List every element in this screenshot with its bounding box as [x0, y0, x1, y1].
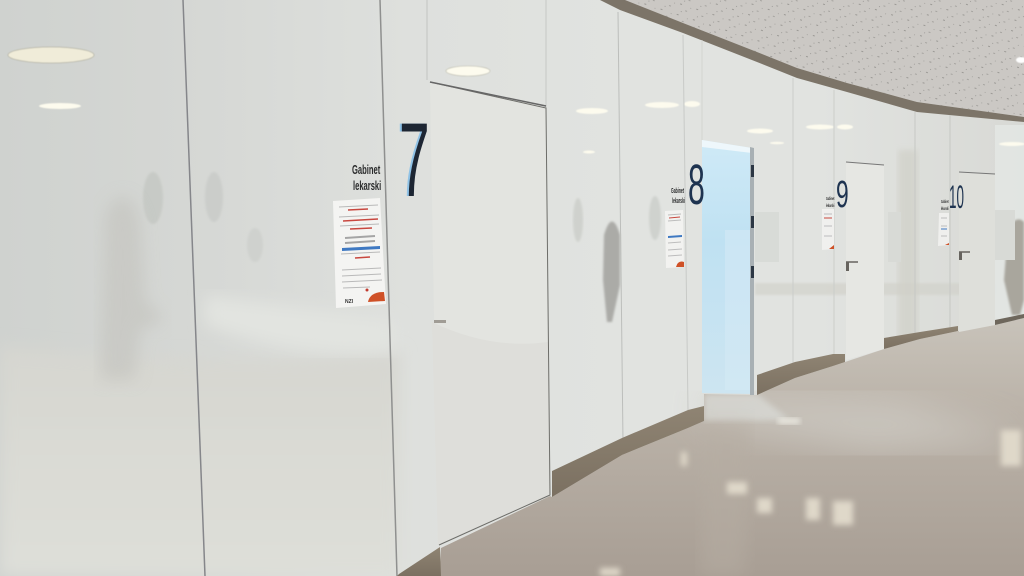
sign: Gabinet lekarski at room 8: lekarski — [672, 198, 685, 206]
sign: Gabinet lekarski at room 10 — [941, 199, 949, 211]
sign: Gabinet lekarski at room 8: Gabinet — [671, 188, 684, 196]
sign: Gabinet lekarski at room 10: Gabinet — [941, 199, 949, 204]
sign: Gabinet lekarski at room 7: lekarski — [353, 180, 381, 194]
sign: room number 7: 7 — [397, 101, 428, 219]
ceiling light — [1016, 57, 1024, 63]
door 10 — [959, 172, 995, 332]
ceiling trim band — [600, 0, 1024, 122]
door 9 — [846, 162, 884, 360]
door 8: open, blue light — [702, 140, 754, 395]
poster at room 7 — [333, 198, 386, 308]
poster at room 8 — [665, 210, 684, 268]
sign: Gabinet lekarski at room 10: lekarski — [941, 206, 949, 211]
ceiling — [620, 0, 1024, 117]
poster at room 10 — [938, 213, 949, 246]
sign: room number 8: 8 — [688, 153, 705, 216]
sign: room number 10: 10 — [949, 181, 964, 216]
sign: Gabinet lekarski at room 8 — [671, 188, 685, 206]
reflections on the wall — [100, 172, 1024, 380]
sign: Gabinet lekarski at room 7 — [352, 164, 381, 194]
sign: Gabinet lekarski at room 9 — [826, 196, 835, 208]
sign: room number 9: 9 — [836, 173, 849, 215]
skirting boards — [397, 314, 1024, 576]
door 7 — [430, 82, 550, 545]
sign: Gabinet lekarski at room 9: Gabinet — [826, 196, 835, 201]
sign: Gabinet lekarski at room 7: Gabinet — [352, 164, 381, 178]
poster logo: NZI — [345, 299, 354, 305]
sign: Gabinet lekarski at room 9: lekarski — [826, 203, 834, 208]
sign: room number 7: 7 — [399, 101, 430, 219]
wall panel seams — [183, 0, 950, 576]
poster at room 9 — [822, 209, 834, 250]
lamp reflections — [8, 47, 1024, 154]
floor — [440, 318, 1024, 576]
